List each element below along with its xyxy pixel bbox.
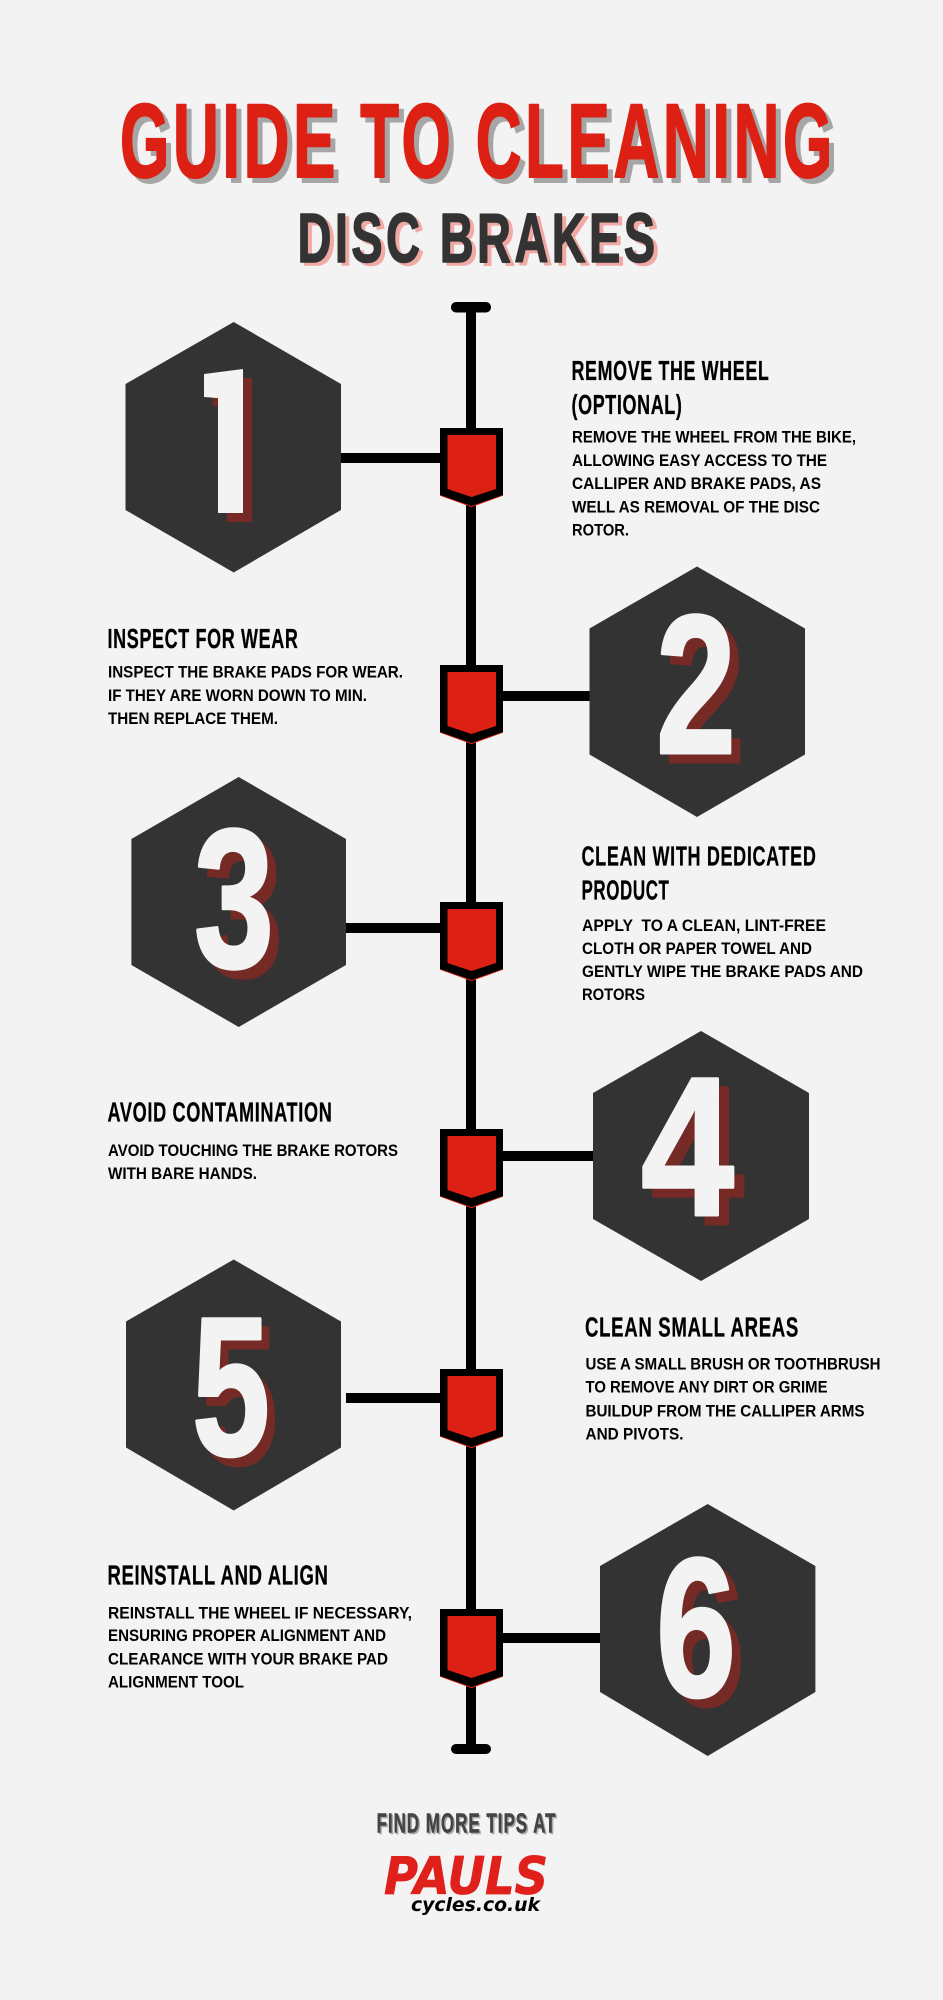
logo: pauls cycles: PAULS: [384, 1847, 548, 1907]
step 4 text: WITH BARE HANDS.: [108, 1165, 257, 1183]
step 3: [131, 777, 863, 1027]
step 1 text: WELL AS REMOVAL OF THE DISC: [572, 499, 820, 517]
footer: find more tips: FIND MORE TIPS AT: [378, 1809, 558, 1840]
step 5: [126, 1260, 880, 1510]
hexagon 6: [600, 1504, 815, 1756]
numeral 5: 5: [192, 1276, 270, 1497]
connector 5: [346, 1393, 441, 1403]
step 1 text: REMOVE THE WHEEL FROM THE BIKE,: [572, 429, 856, 447]
step 2 text: THEN REPLACE THEM.: [108, 710, 278, 728]
numeral 4: 4: [651, 1045, 744, 1266]
step 2 text: IF THEY ARE WORN DOWN TO MIN.: [108, 687, 367, 705]
numeral 5: 5: [200, 1285, 278, 1506]
step 2: [108, 566, 805, 817]
logo: pauls cycles: cycles.co.uk: [411, 1894, 541, 1916]
step 1 text: CALLIPER AND BRAKE PADS, AS: [572, 475, 821, 493]
step 3 text: CLOTH OR PAPER TOWEL AND: [582, 940, 812, 958]
subtitle: disc brakes: DISC BRAKES: [302, 202, 662, 280]
step 3 heading: [582, 840, 816, 905]
numeral 2: 2: [656, 574, 736, 795]
step 5 text: [586, 1355, 880, 1443]
marker 3: [440, 902, 503, 980]
step 1 text: [572, 429, 856, 540]
numeral 2: 2: [665, 583, 745, 804]
hexagon 3: [131, 777, 346, 1027]
step 5 text: USE A SMALL BRUSH OR TOOTHBRUSH: [586, 1355, 880, 1373]
step 6: [108, 1504, 815, 1756]
step 3 heading: CLEAN WITH DEDICATED: [582, 840, 816, 871]
marker 1: [440, 428, 503, 506]
connector 6: [502, 1633, 600, 1643]
hexagon 1: [126, 322, 341, 572]
step 2 heading: INSPECT FOR WEAR: [108, 623, 298, 654]
step 3 text: ROTORS: [582, 986, 645, 1004]
subtitle: disc brakes: DISC BRAKES: [298, 199, 658, 277]
timeline spine: [451, 302, 491, 1754]
numeral 6: 6: [665, 1526, 745, 1747]
step 4: [108, 1031, 809, 1281]
step 6 text: ENSURING PROPER ALIGNMENT AND: [108, 1627, 386, 1645]
hexagon 5: [126, 1260, 341, 1510]
step 5 text: TO REMOVE ANY DIRT OR GRIME: [586, 1379, 828, 1397]
step 6 heading: REINSTALL AND ALIGN: [108, 1559, 328, 1590]
step 6 text: REINSTALL THE WHEEL IF NECESSARY,: [108, 1604, 412, 1622]
numeral 1: 1: [185, 343, 285, 564]
step 2 text: INSPECT THE BRAKE PADS FOR WEAR.: [108, 664, 403, 682]
hexagon 4: [593, 1031, 809, 1281]
hexagon 2: [590, 566, 805, 817]
numeral 3: 3: [194, 788, 274, 1009]
connector 1: [341, 453, 441, 463]
numeral 6: 6: [656, 1517, 736, 1738]
step 2 text: [108, 664, 403, 728]
step 1: [126, 322, 856, 572]
footer: find more tips: FIND MORE TIPS AT: [376, 1808, 556, 1838]
step 6 text: ALIGNMENT TOOL: [108, 1674, 244, 1692]
marker 5: [440, 1369, 503, 1448]
marker 6: [440, 1609, 503, 1688]
step 4 text: [108, 1142, 398, 1183]
step 3 text: [582, 917, 863, 1004]
step 1 text: ROTOR.: [572, 522, 629, 540]
step 5 heading: CLEAN SMALL AREAS: [585, 1312, 799, 1343]
numeral 4: 4: [641, 1036, 734, 1257]
numeral 3: 3: [203, 797, 283, 1018]
footer: find more tips: [376, 1808, 558, 1840]
step 3 heading: PRODUCT: [582, 874, 670, 905]
connector 2: [502, 691, 590, 701]
connector 4: [502, 1151, 593, 1161]
step 4 heading: AVOID CONTAMINATION: [108, 1097, 332, 1128]
marker 2: [440, 665, 503, 744]
step 4 text: AVOID TOUCHING THE BRAKE ROTORS: [108, 1142, 398, 1160]
step 6 text: CLEARANCE WITH YOUR BRAKE PAD: [108, 1650, 388, 1668]
numeral 1: [204, 369, 252, 522]
step 3 text: APPLY TO A CLEAN, LINT-FREE: [582, 917, 826, 935]
step 5 text: BUILDUP FROM THE CALLIPER ARMS: [586, 1402, 864, 1420]
step 6 text: [108, 1604, 412, 1692]
marker 4: [440, 1129, 503, 1208]
step 1 heading: [572, 355, 770, 420]
step 1 text: ALLOWING EASY ACCESS TO THE: [572, 452, 827, 470]
subtitle: disc brakes: [298, 199, 662, 280]
step 5 text: AND PIVOTS.: [586, 1425, 684, 1443]
step 3 text: GENTLY WIPE THE BRAKE PADS AND: [582, 963, 863, 981]
numeral 1: 1: [176, 334, 276, 555]
step 1 heading: REMOVE THE WHEEL: [572, 355, 770, 386]
connector 3: [346, 923, 441, 933]
step 1 heading: (OPTIONAL): [572, 389, 682, 420]
